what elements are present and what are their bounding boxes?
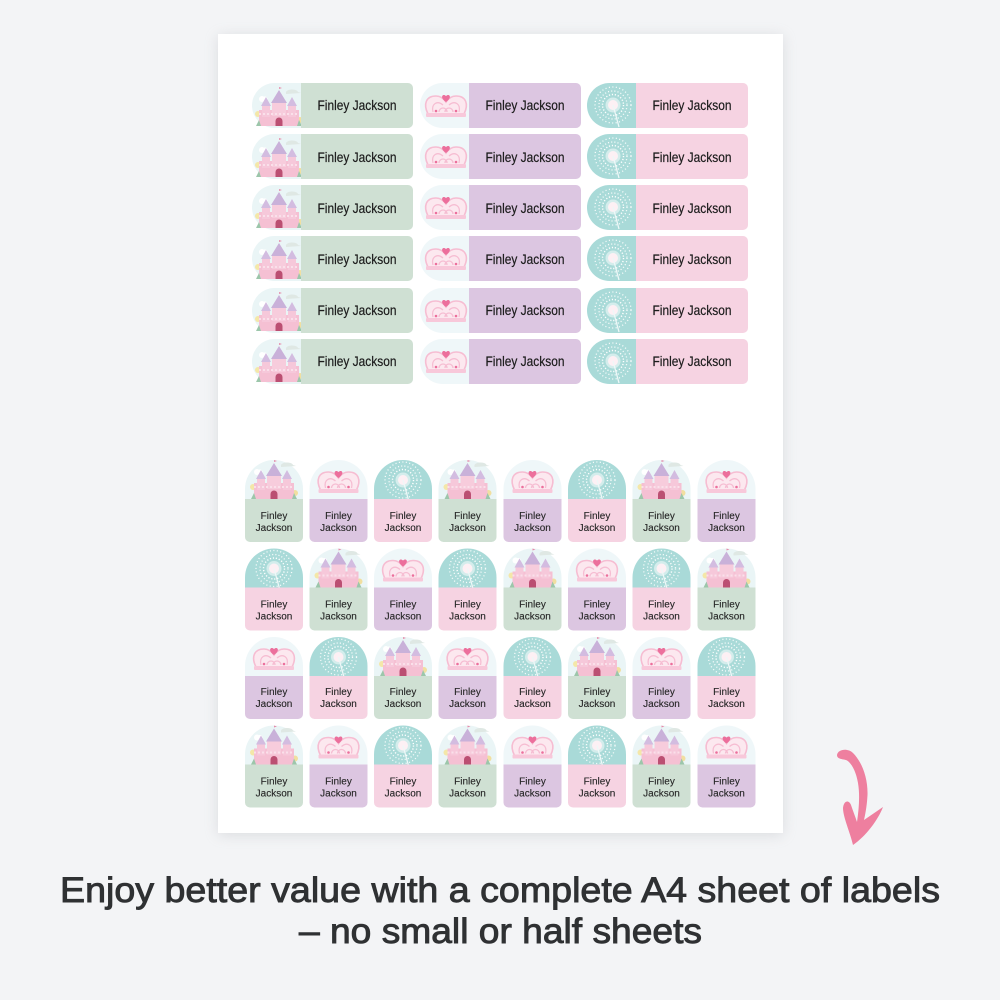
label: r3 c2 wand: Finley [325,687,352,698]
label: r3 c5 wand: Finley [519,687,546,698]
label: r4 c6 wand: Finley [584,776,610,788]
label: crown row 2 [420,134,581,179]
label: r2 c2 castle: Jackson [320,612,357,622]
label: r2 c6 crown: Finley [584,600,610,610]
label: r4 c4 castle: Finley [454,776,481,788]
label: r2 c8 castle [698,548,756,630]
label: r2 c7 wand: Jackson [643,612,680,622]
label: r1 c4 castle: Finley [454,511,481,522]
panel: A4 sheet [218,34,783,835]
heading: – no small or half sheets [299,912,702,951]
label: r1 c1 castle [245,460,303,542]
label: castle row 1: Finley Jackson [318,97,396,113]
label: r1 c2 crown [310,460,368,542]
arrow: pink hand-drawn arrow [837,750,883,845]
label: crown row 3: Finley Jackson [486,200,564,216]
label: r3 c7 crown [632,637,690,719]
label: r1 c1 castle: Jackson [256,523,292,534]
label: r3 c7 crown: Jackson [643,699,680,710]
label: crown row 4 [420,236,581,281]
label: r1 c6 wand [568,460,626,542]
label: r1 c2 crown: Finley [325,511,352,522]
label: r3 c2 wand: Jackson [320,699,357,710]
label: crown row 3 [420,185,581,230]
label: r1 c4 castle [438,460,496,542]
label: r3 c3 castle [374,637,432,719]
label: r4 c5 crown [504,726,562,808]
label: r2 c5 castle: Finley [519,600,546,610]
heading [60,871,940,951]
label: r2 c4 wand: Finley [454,600,481,610]
label: castle row 6 [252,339,413,384]
label: r4 c8 crown: Finley [713,776,740,788]
label: wand row 3 [587,185,748,230]
label: wand row 5 [587,288,748,333]
label: r3 c2 wand [310,637,368,719]
label: wand row 2 [587,134,748,179]
label: r3 c5 wand [504,637,562,719]
label: r2 c7 wand [632,548,690,630]
label: r2 c3 crown [374,548,432,630]
label: r4 c7 castle [632,726,690,808]
label: wand row 6 [587,339,748,384]
label: r3 c8 wand [698,637,756,719]
label: r4 c7 castle: Finley [648,776,675,788]
label: r4 c1 castle: Jackson [256,788,292,800]
label: r1 c3 wand: Jackson [385,523,421,534]
label: crown row 4: Finley Jackson [486,251,564,267]
heading: Enjoy better value with a complete A4 sheet of labels [60,871,940,910]
label: r3 c4 crown [438,637,496,719]
label: r1 c5 crown: Jackson [514,523,551,534]
label: r2 c8 castle: Finley [713,600,740,610]
label: r4 c2 crown [310,726,368,808]
label: r1 c4 castle: Jackson [449,523,486,534]
label: castle row 1 [252,83,413,128]
label: wand row 4 [587,236,748,281]
label: r3 c7 crown: Finley [648,687,675,698]
label: wand row 4: Finley Jackson [652,251,732,267]
label: castle row 3 [252,185,413,230]
label: r3 c8 wand: Jackson [708,699,745,710]
label: r1 c8 crown: Finley [713,511,740,522]
label: r2 c2 castle: Finley [325,600,352,610]
label: r3 c4 crown: Jackson [449,699,486,710]
panel: horizontal name labels [252,83,748,384]
label: r1 c1 castle: Finley [261,511,287,522]
label: r3 c5 wand: Jackson [514,699,551,710]
label: crown row 1: Finley Jackson [486,97,564,113]
label: wand row 1 [587,83,748,128]
label: r4 c6 wand: Jackson [579,788,615,800]
label: r1 c8 crown [698,460,756,542]
label: r1 c5 crown [504,460,562,542]
label: r4 c1 castle: Finley [261,776,287,788]
label: crown row 6: Finley Jackson [486,353,564,369]
label: r3 c1 crown: Finley [261,687,287,698]
label: castle row 4 [252,236,413,281]
label: r4 c4 castle: Jackson [449,788,486,800]
label: r4 c1 castle [245,726,303,808]
label: r2 c3 crown: Jackson [385,612,421,622]
label: wand row 6: Finley Jackson [652,353,732,369]
label: r4 c8 crown [698,726,756,808]
label: crown row 2: Finley Jackson [486,149,564,165]
label: r2 c2 castle [310,548,368,630]
label: r1 c3 wand [374,460,432,542]
label: crown row 5 [420,288,581,333]
label: r1 c8 crown: Jackson [708,523,745,534]
label: wand row 2: Finley Jackson [652,149,732,165]
label: wand row 5: Finley Jackson [652,302,732,318]
label: castle row 2 [252,134,413,179]
label: crown row 6 [420,339,581,384]
label: r4 c3 wand [374,726,432,808]
panel: small dome labels [245,460,756,808]
label: r1 c7 castle: Finley [648,511,675,522]
label: r4 c4 castle [438,726,496,808]
label: r1 c7 castle [632,460,690,542]
label: wand row 3: Finley Jackson [652,200,732,216]
label: crown row 1 [420,83,581,128]
label: r4 c5 crown: Jackson [514,788,551,800]
label: r2 c6 crown: Jackson [579,612,615,622]
label: r3 c3 castle: Jackson [385,699,421,710]
label: r3 c4 crown: Finley [454,687,481,698]
label: castle row 6: Finley Jackson [318,353,396,369]
label: r4 c6 wand [568,726,626,808]
label: castle row 5: Finley Jackson [318,302,396,318]
label: r2 c1 wand [245,548,303,630]
label: r4 c5 crown: Finley [519,776,546,788]
label: r3 c1 crown [245,637,303,719]
label: r3 c6 castle [568,637,626,719]
label: r3 c8 wand: Finley [713,687,740,698]
label: r1 c2 crown: Jackson [320,523,357,534]
label: wand row 1: Finley Jackson [652,97,732,113]
label: r1 c3 wand: Finley [390,511,416,522]
label: r4 c7 castle: Jackson [643,788,680,800]
label: r4 c8 crown: Jackson [708,788,745,800]
label: r2 c4 wand [438,548,496,630]
label: r1 c6 wand: Finley [584,511,610,522]
label: castle row 2: Finley Jackson [318,149,396,165]
label: r2 c5 castle [504,548,562,630]
label: castle row 3: Finley Jackson [318,200,396,216]
label: r3 c6 castle: Jackson [579,699,615,710]
label: r1 c7 castle: Jackson [643,523,680,534]
label: r2 c5 castle: Jackson [514,612,551,622]
label: r3 c3 castle: Finley [390,687,416,698]
label: r2 c6 crown [568,548,626,630]
label: r2 c4 wand: Jackson [449,612,486,622]
label: r4 c2 crown: Finley [325,776,352,788]
label: r2 c8 castle: Jackson [708,612,745,622]
label: r2 c7 wand: Finley [648,600,675,610]
label: r1 c5 crown: Finley [519,511,546,522]
label: r4 c3 wand: Jackson [385,788,421,800]
label: r4 c3 wand: Finley [390,776,416,788]
label: crown row 5: Finley Jackson [486,302,564,318]
label: castle row 5 [252,288,413,333]
label: r2 c1 wand: Finley [261,600,287,610]
label: r3 c6 castle: Finley [584,687,610,698]
label: r3 c1 crown: Jackson [256,699,292,710]
label: r2 c3 crown: Finley [390,600,416,610]
label: r2 c1 wand: Jackson [256,612,292,622]
label: castle row 4: Finley Jackson [318,251,396,267]
label: r4 c2 crown: Jackson [320,788,357,800]
label: r1 c6 wand: Jackson [579,523,615,534]
